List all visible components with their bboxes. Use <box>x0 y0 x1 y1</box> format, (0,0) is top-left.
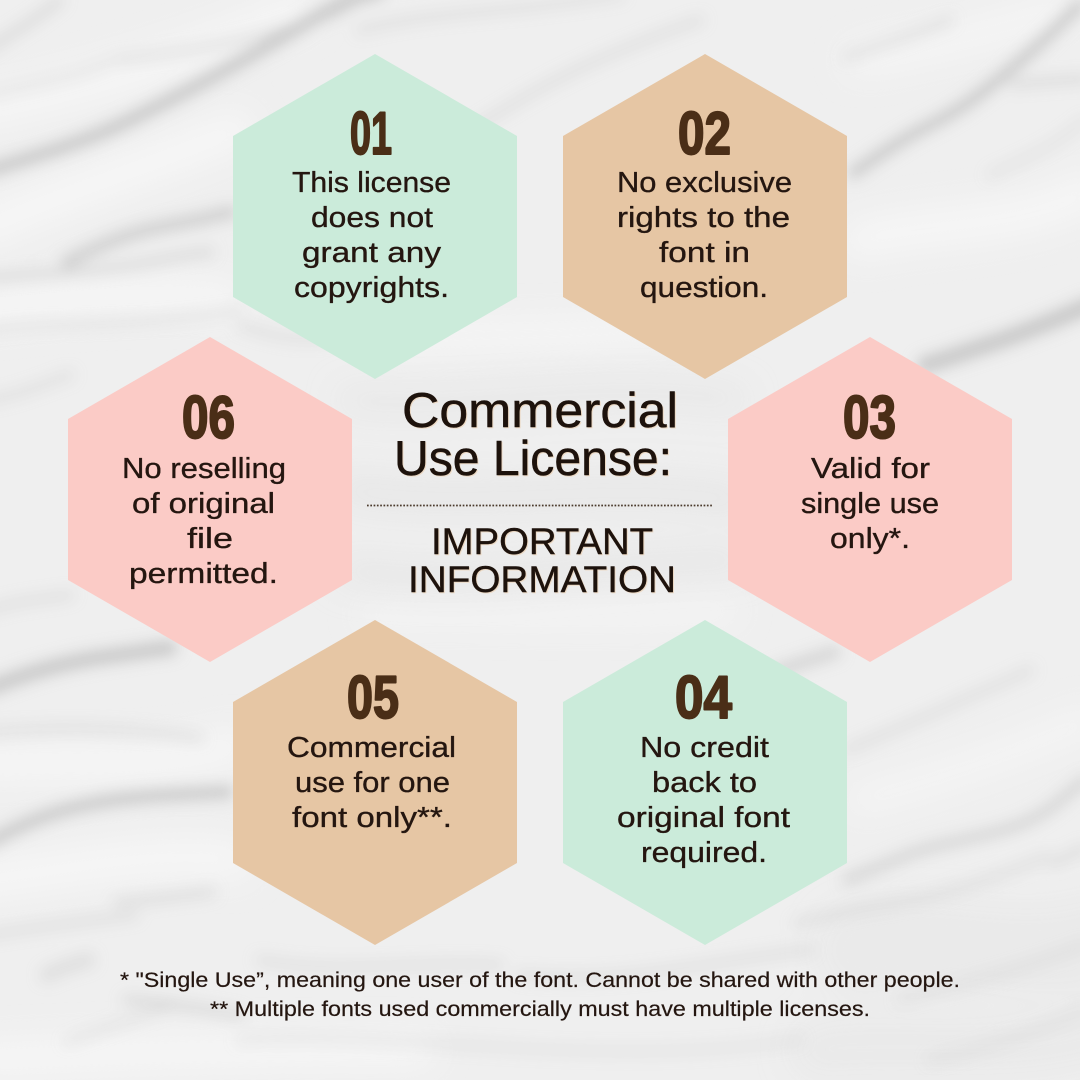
hexagon 05 <box>233 620 517 945</box>
text 04: No credit <box>640 732 769 764</box>
subtitle: INFORMATION <box>408 559 676 600</box>
number 04: 04 <box>675 664 733 731</box>
text 03: only*. <box>830 523 910 555</box>
number 03: 03 <box>843 384 896 451</box>
footnotes <box>120 969 960 1021</box>
title: Use License: <box>394 432 672 486</box>
text 04: original font <box>617 802 790 834</box>
hexagon 06 <box>68 337 352 662</box>
text 05: Commercial <box>287 732 456 764</box>
hexagon 02 <box>563 54 847 379</box>
bottom right <box>775 652 835 672</box>
text 05 <box>287 732 456 834</box>
text 01: copyrights. <box>294 272 449 304</box>
text 06 <box>122 453 286 590</box>
footnotes: ** Multiple fonts used commercially must have multiple licenses. <box>210 998 870 1021</box>
hexagon 01 <box>233 54 517 379</box>
top centre <box>470 20 700 130</box>
number 05: 05 <box>347 664 399 731</box>
text 02: font in <box>659 237 750 269</box>
text 01: does not <box>311 202 433 234</box>
bottom centre <box>260 960 500 967</box>
text 01 <box>292 167 451 304</box>
title: Commercial <box>402 384 678 438</box>
text 03: single use <box>801 488 939 520</box>
title <box>394 384 678 486</box>
text 03 <box>801 453 939 555</box>
number 01: 01 <box>350 100 392 167</box>
text 01: This license <box>292 167 451 199</box>
hexagon 04 <box>563 620 847 945</box>
text 05: font only**. <box>292 802 452 834</box>
mid left <box>0 375 70 400</box>
text 02 <box>617 167 792 304</box>
text 06: permitted. <box>129 558 278 590</box>
bottom left <box>0 648 170 688</box>
number 02: 02 <box>678 100 731 167</box>
text 04 <box>617 732 790 869</box>
subtitle <box>408 521 676 600</box>
subtitle: IMPORTANT <box>431 521 653 562</box>
text 06: No reselling <box>122 453 286 485</box>
text 02: question. <box>640 272 768 304</box>
top right <box>853 5 1080 173</box>
text 02: rights to the <box>617 202 790 234</box>
text 04: back to <box>652 767 757 799</box>
text 06: of original <box>132 488 275 520</box>
footnotes: * "Single Use”, meaning one user of the font. Cannot be shared with other people. <box>120 969 960 992</box>
text 03: Valid for <box>811 453 930 485</box>
text 04: required. <box>641 837 767 869</box>
hexagon 03 <box>728 337 1012 662</box>
text 02: No exclusive <box>617 167 792 199</box>
number 06: 06 <box>182 384 235 451</box>
text 06: file <box>187 523 233 555</box>
text 05: use for one <box>295 767 450 799</box>
text 01: grant any <box>302 237 442 269</box>
top left <box>0 0 380 170</box>
